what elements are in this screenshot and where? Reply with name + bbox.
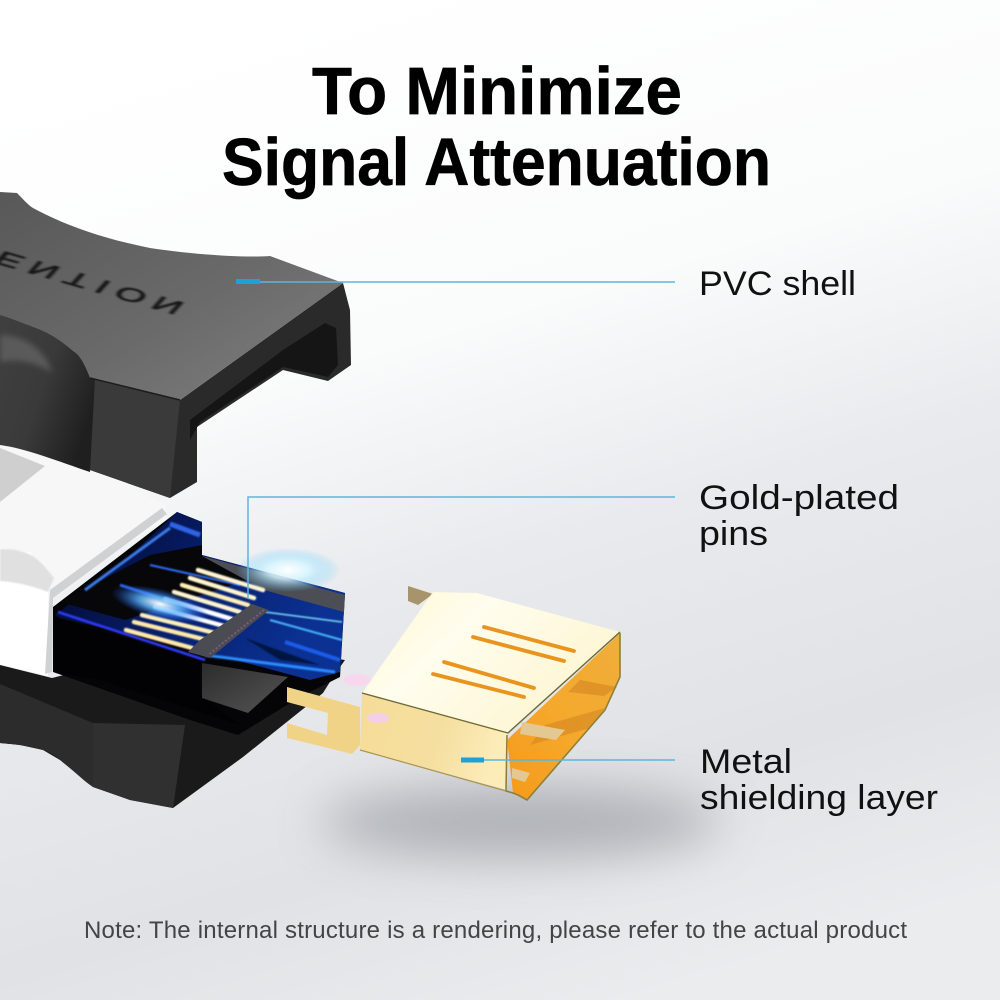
label: gold-plated pins: Gold-plated [699,479,899,517]
back tab [408,586,433,605]
inner opening [507,633,620,800]
lower black strip [55,618,240,725]
callout line: gold-plated pins [248,497,675,598]
upper black block [60,545,262,620]
connector shadow [320,786,720,858]
panel: glowing pin interior [53,512,345,735]
tail fork [287,687,360,754]
shell side face [90,378,180,498]
pin carrier bar [188,604,269,658]
pink glints [343,674,371,686]
interior black base [53,512,345,735]
title [222,54,771,200]
shell left lobe [0,300,95,472]
top face [362,592,620,733]
label: metal shielding layer: Metal [700,743,792,781]
upper right grey surface [202,556,345,612]
grey plate [202,663,288,713]
label: metal shielding layer [700,743,938,817]
bottom shell front face [93,723,185,808]
title: To Minimize [312,54,682,129]
interior blue field [55,512,345,680]
shell top face [0,192,343,400]
callout line: metal shielding layer [461,759,675,761]
title: Signal Attenuation [222,125,771,200]
panel: top PVC shell [0,192,351,498]
label: gold-plated pins: pins [699,515,768,553]
note: Note: The internal structure is a rendering, please refer to the actual product [84,917,907,944]
callout line: PVC shell [236,280,675,283]
dark streak [245,638,320,665]
light glow: top right [236,548,340,592]
label: gold-plated pins [699,479,899,553]
shell right edge [90,283,351,498]
label: metal shielding layer: shielding layer [700,779,938,817]
icon: white plug body [0,440,167,676]
icon: gold metal shield [287,586,620,800]
bottom shell body left [0,684,93,787]
slots [433,627,574,697]
bottom shell base silhouette [0,640,345,808]
light glow: pins [108,577,212,631]
blue light streaks [58,524,342,672]
side face [360,693,508,790]
shell inner recess [190,323,338,440]
gold-white pins [126,570,263,648]
label: PVC shell: PVC shell [699,265,856,303]
panel: bottom PVC shell [0,640,345,808]
